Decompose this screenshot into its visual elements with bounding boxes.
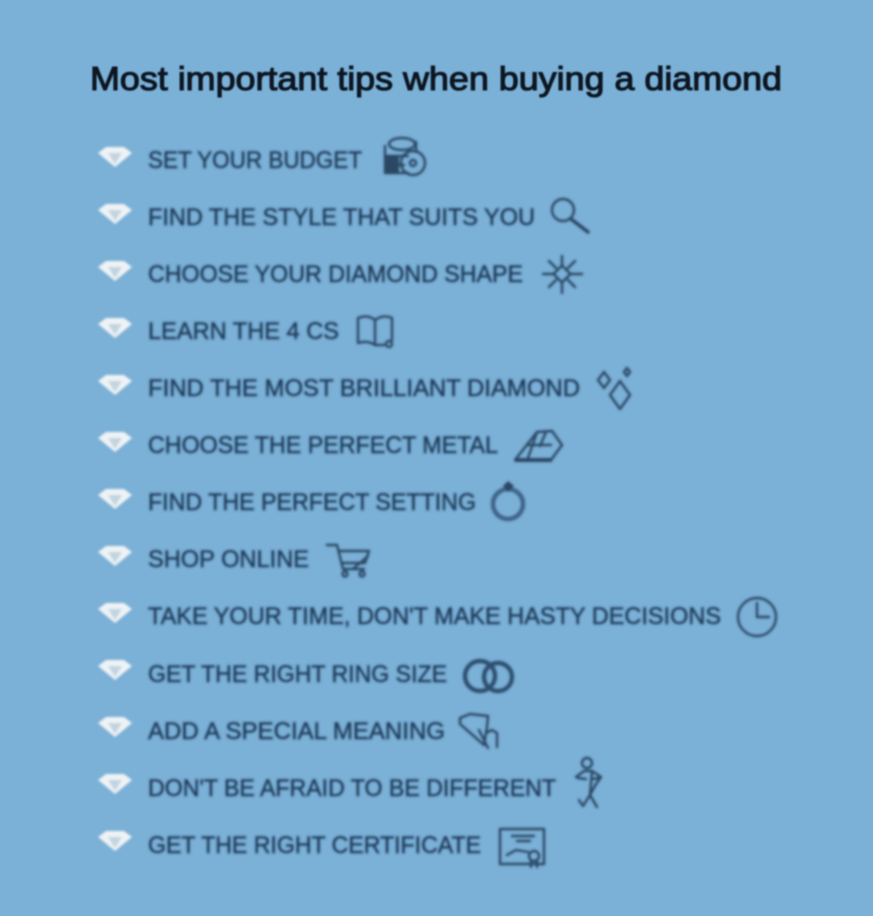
icon: hand holding heart xyxy=(460,714,497,748)
tip 8: shop online: SHOP ONLINE xyxy=(148,546,309,573)
tip 5: most brilliant diamond: FIND THE MOST BRILLIANT DIAMOND xyxy=(148,375,580,402)
tip 8: shop online xyxy=(98,545,369,576)
icon: coins xyxy=(385,138,425,175)
tip 11: special meaning: ADD A SPECIAL MEANING xyxy=(148,718,445,745)
tip 4: learn the 4 Cs xyxy=(98,316,392,347)
tip 1: set your budget: SET YOUR BUDGET xyxy=(148,147,362,174)
tip 6: perfect metal xyxy=(98,431,562,462)
tip 13: certificate: GET THE RIGHT CERTIFICATE xyxy=(148,832,481,859)
icon: metal bars xyxy=(515,431,562,462)
icon: magnifying glass xyxy=(552,199,588,232)
tip 4: learn the 4 Cs: LEARN THE 4 CS xyxy=(148,318,339,345)
icon: ring xyxy=(493,481,523,519)
icon: sparkle xyxy=(543,256,582,293)
tip 3: choose shape xyxy=(98,256,582,293)
icon: clock xyxy=(738,598,776,636)
tip 12: be different xyxy=(98,758,601,807)
tip 5: most brilliant diamond xyxy=(98,368,630,409)
tip 2: find the style: FIND THE STYLE THAT SUITS YOU xyxy=(148,204,535,231)
tip 11: special meaning xyxy=(98,714,497,748)
tip 3: choose shape: CHOOSE YOUR DIAMOND SHAPE xyxy=(148,261,523,288)
icon: diamonds xyxy=(598,368,630,409)
icon: book xyxy=(358,316,392,347)
tip 2: find the style xyxy=(98,199,588,232)
tip 9: take your time xyxy=(98,598,776,636)
title: Most important tips when buying a diamond xyxy=(90,60,782,97)
tip 6: perfect metal: CHOOSE THE PERFECT METAL xyxy=(148,432,498,459)
icon: certificate xyxy=(500,829,544,867)
icon: two rings xyxy=(465,661,512,691)
tip 9: take your time: TAKE YOUR TIME, DON'T MAKE HASTY DECISIONS xyxy=(148,603,721,630)
tip 1: set your budget xyxy=(98,138,425,175)
tip 13: certificate xyxy=(98,829,544,867)
tip 7: perfect setting xyxy=(98,481,523,519)
icon: shopping cart xyxy=(327,545,369,576)
tip 12: be different: DON'T BE AFRAID TO BE DIFFERENT xyxy=(148,775,556,802)
tip 7: perfect setting: FIND THE PERFECT SETTING xyxy=(148,489,476,516)
icon: person xyxy=(576,758,601,807)
tips list xyxy=(98,138,776,867)
tip 10: ring size xyxy=(98,660,512,691)
tip 10: ring size: GET THE RIGHT RING SIZE xyxy=(148,661,447,688)
